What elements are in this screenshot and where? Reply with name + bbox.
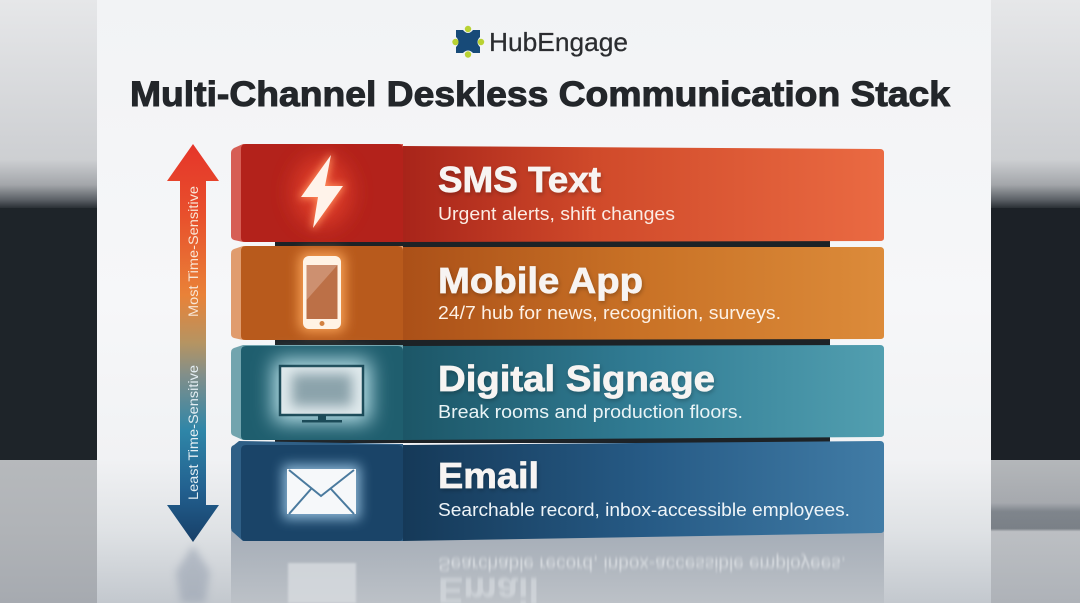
icon: envelope xyxy=(283,465,360,519)
label: least time-sensitive: Least Time-Sensitive xyxy=(186,365,201,500)
arrow reflection xyxy=(176,545,210,603)
heading: SMS Text: SMS Text xyxy=(438,159,601,200)
panel: Email xyxy=(231,441,884,541)
title: Multi-Channel Deskless Communication Stack xyxy=(130,75,951,114)
heading: Mobile App: Mobile App xyxy=(438,260,643,301)
description: SMS Text: Urgent alerts, shift changes xyxy=(438,204,675,224)
floor reflection: Searchable record, inbox-accessible employees. xyxy=(438,554,846,574)
logo wordmark: HubEngage xyxy=(489,27,628,57)
arrow: time-sensitivity scale xyxy=(167,144,219,542)
description: Email: Searchable record, inbox-accessible employees. xyxy=(438,500,850,520)
label: most time-sensitive: Most Time-Sensitive xyxy=(186,186,201,317)
panel: SMS Text xyxy=(231,144,884,242)
icon: logo mark xyxy=(452,26,484,58)
panel: Digital Signage xyxy=(231,345,884,440)
icon: monitor xyxy=(274,360,370,422)
description: Mobile App: 24/7 hub for news, recognition, surveys. xyxy=(438,303,781,323)
icon: smartphone xyxy=(299,252,345,332)
heading: Email: Email xyxy=(438,455,539,496)
panel: Mobile App xyxy=(231,246,884,340)
heading: Digital Signage: Digital Signage xyxy=(438,358,715,399)
floor reflection xyxy=(288,554,846,603)
icon: lightning bolt xyxy=(292,155,352,228)
description: Digital Signage: Break rooms and production floors. xyxy=(438,402,743,422)
panel: gaps between layers xyxy=(275,239,830,443)
logo: HubEngage xyxy=(452,26,628,58)
